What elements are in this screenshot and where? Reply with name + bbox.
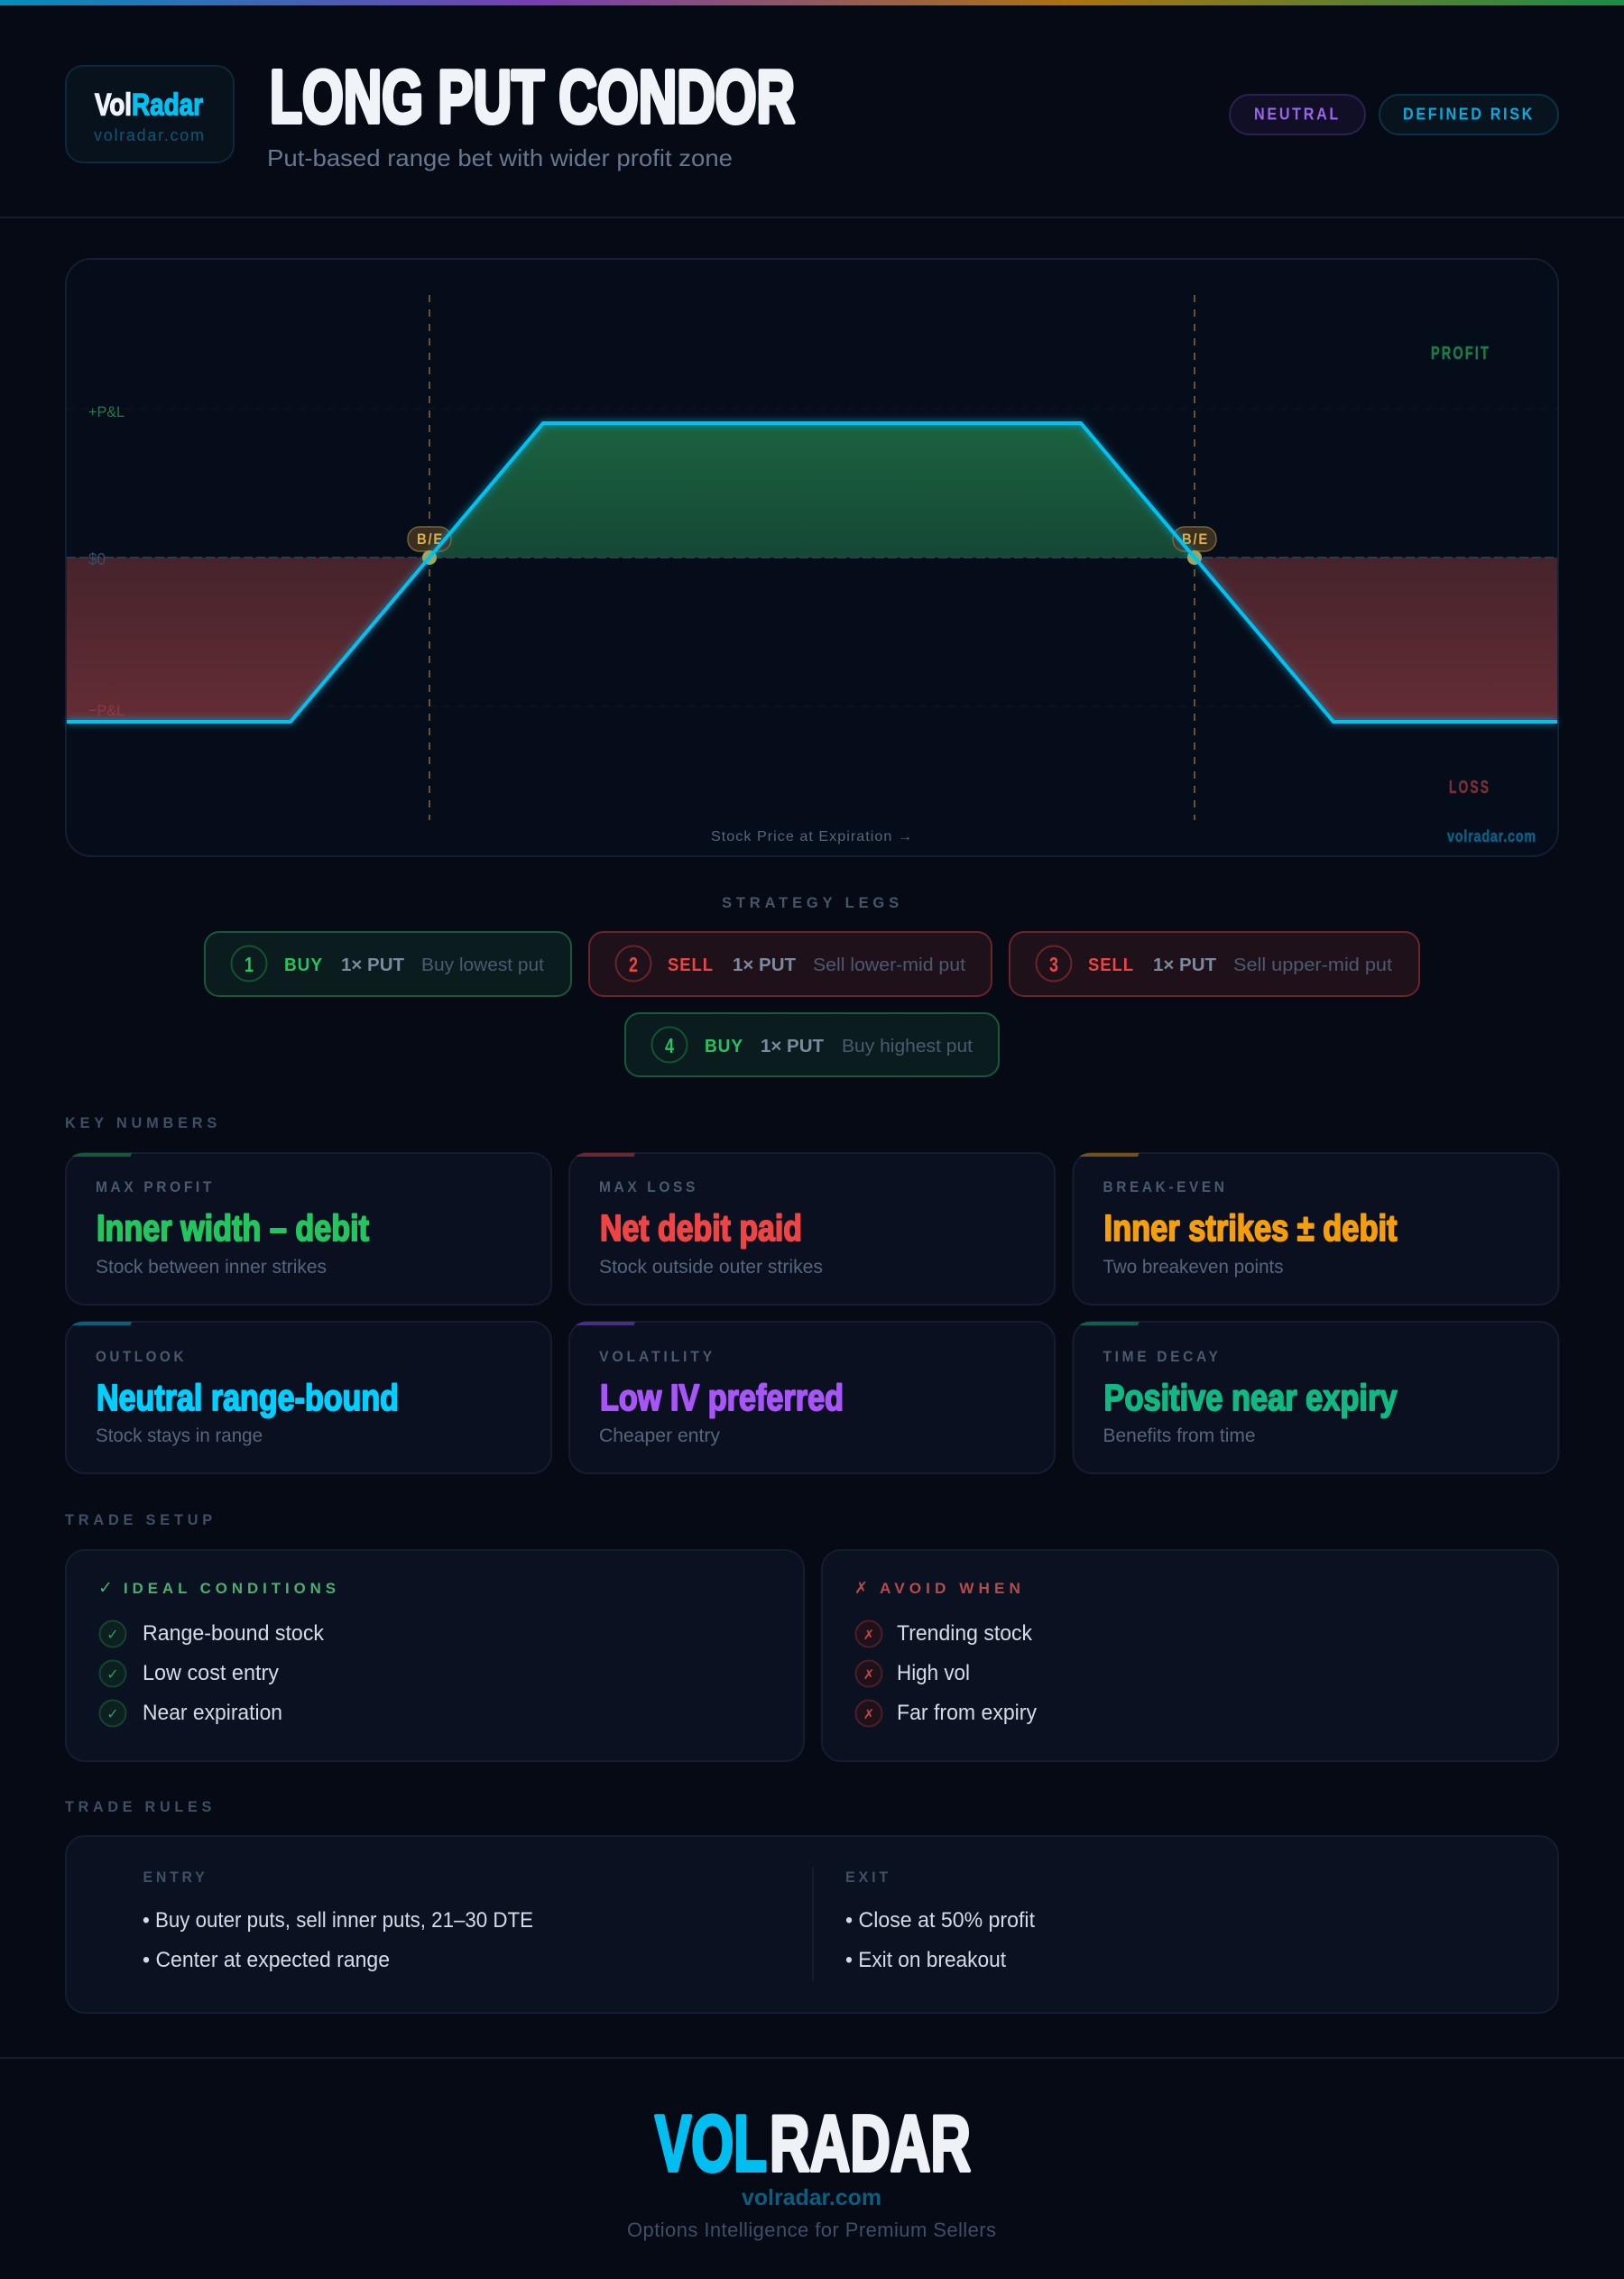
leg 4: BUY (705, 1037, 743, 1056)
heading: key numbers: KEY NUMBERS (65, 1114, 221, 1131)
footer tagline: Options Intelligence for Premium Sellers (627, 2219, 996, 2241)
card: time decay: Benefits from time (1103, 1426, 1256, 1446)
leg 3: 3 (1049, 953, 1058, 976)
leg 3 (1010, 932, 1419, 996)
leg 3: SELL (1088, 955, 1134, 975)
leg 2: 2 (629, 953, 638, 976)
leg 2: SELL (668, 955, 714, 975)
axis label: $0: $0 (88, 550, 106, 568)
condition: low cost entry: ✓ (106, 1667, 119, 1683)
card: outlook (66, 1322, 551, 1473)
panel: avoid when (822, 1550, 1558, 1761)
logo badge (66, 66, 234, 162)
footer (627, 2099, 996, 2241)
avoid: high vol (855, 1660, 970, 1687)
card: max loss: Stock outside outer strikes (599, 1257, 823, 1278)
leg 1: Buy lowest put (421, 955, 544, 975)
entry rules: • Center at expected range (143, 1948, 390, 1972)
exit rules: • Exit on breakout (845, 1948, 1006, 1972)
avoid: far from expiry (855, 1700, 1037, 1727)
footer url: volradar.com (742, 2185, 881, 2210)
chart watermark: volradar.com (1447, 827, 1536, 845)
avoid: far from expiry: ✗ (863, 1707, 874, 1722)
leg 1: BUY (284, 955, 323, 975)
panel: avoid when: AVOID WHEN (880, 1580, 1025, 1597)
logo badge: volradar.com (94, 126, 204, 144)
heading: trade rules: TRADE RULES (65, 1798, 216, 1815)
entry rules: • Buy outer puts, sell inner puts, 21–30 DTE (143, 1908, 533, 1933)
panel: ideal conditions: ✓ (98, 1579, 113, 1598)
footer logo: VOL (655, 2099, 767, 2188)
break-even marker right: B/E (1182, 531, 1209, 548)
loss zone right (1195, 558, 1557, 722)
card: break-even: Two breakeven points (1103, 1257, 1283, 1278)
leg 2: Sell lower-mid put (813, 955, 965, 975)
card: break-even: BREAK-EVEN (1103, 1178, 1227, 1195)
condition: range-bound stock: Range-bound stock (143, 1621, 325, 1646)
card: volatility: Cheaper entry (599, 1426, 721, 1446)
card: break-even (1074, 1153, 1559, 1305)
card: max loss: Net debit paid (600, 1207, 802, 1249)
heading: strategy legs: STRATEGY LEGS (722, 894, 903, 911)
card: max profit: Inner width – debit (97, 1207, 369, 1249)
break-even marker right (1173, 527, 1216, 565)
leg 4: 1× PUT (761, 1037, 824, 1056)
leg 3: Sell upper-mid put (1233, 955, 1392, 975)
top gradient bar (0, 0, 1624, 5)
condition: near expiration (99, 1700, 282, 1727)
condition: range-bound stock: ✓ (106, 1628, 119, 1643)
footer logo: RADAR (770, 2099, 971, 2188)
leg 1: 1 (245, 953, 254, 976)
leg 4: Buy highest put (842, 1037, 973, 1056)
heading: trade setup: TRADE SETUP (65, 1511, 217, 1528)
badge: defined risk (1379, 95, 1558, 134)
condition: near expiration: ✓ (106, 1707, 119, 1722)
card: volatility: VOLATILITY (599, 1348, 715, 1365)
card: time decay: TIME DECAY (1103, 1348, 1222, 1365)
avoid: far from expiry: Far from expiry (897, 1701, 1037, 1725)
card: time decay (1074, 1322, 1559, 1473)
entry rules: ENTRY (143, 1868, 208, 1886)
badge: neutral (1230, 95, 1365, 134)
exit rules (845, 1868, 1035, 1972)
axis label: -P&L: −P&L (88, 702, 125, 719)
label: profit: PROFIT (1431, 344, 1490, 364)
avoid: high vol: ✗ (863, 1667, 874, 1683)
card: break-even: Inner strikes ± debit (1104, 1207, 1398, 1249)
payoff line (67, 423, 1557, 722)
card: volatility (569, 1322, 1055, 1473)
break-even marker left: B/E (417, 531, 444, 548)
title: LONG PUT CONDOR (270, 54, 795, 139)
leg 2: 1× PUT (733, 955, 796, 975)
badge: defined risk: DEFINED RISK (1403, 105, 1535, 123)
condition: low cost entry: Low cost entry (143, 1661, 279, 1685)
badge: neutral: NEUTRAL (1254, 105, 1341, 123)
card: max loss (569, 1153, 1055, 1305)
exit rules: EXIT (845, 1868, 891, 1886)
leg 4 (625, 1013, 999, 1076)
card: max loss: MAX LOSS (599, 1178, 698, 1195)
card: max profit: MAX PROFIT (96, 1178, 215, 1195)
card: volatility: Low IV preferred (600, 1377, 844, 1418)
leg 3: 1× PUT (1153, 955, 1216, 975)
logo badge: Vol (95, 88, 132, 123)
leg 1 (205, 932, 571, 996)
axis label: +P&L: +P&L (88, 403, 125, 420)
x axis label: Stock Price at Expiration → (711, 829, 913, 844)
card: time decay: Positive near expiry (1104, 1377, 1398, 1418)
panel: trade rules (66, 1836, 1558, 2013)
card: max profit: Stock between inner strikes (96, 1257, 327, 1278)
label: loss: LOSS (1449, 778, 1490, 798)
exit rules: • Close at 50% profit (845, 1908, 1035, 1933)
leg 1: 1× PUT (341, 955, 404, 975)
loss zone left (67, 558, 429, 722)
card: outlook: OUTLOOK (96, 1348, 187, 1365)
panel: ideal conditions (66, 1550, 804, 1761)
card: outlook: Neutral range-bound (97, 1377, 399, 1418)
panel: payoff chart (66, 259, 1558, 856)
entry rules (143, 1868, 533, 1972)
panel: avoid when: ✗ (854, 1579, 868, 1597)
leg 2 (589, 932, 992, 996)
condition: low cost entry (99, 1660, 279, 1687)
footer logo (655, 2099, 971, 2188)
logo badge: Radar (132, 88, 203, 123)
break-even marker left (408, 527, 451, 565)
profit zone (429, 423, 1195, 558)
avoid: high vol: High vol (897, 1661, 970, 1685)
avoid: trending stock: Trending stock (897, 1621, 1033, 1646)
header (66, 54, 1558, 171)
card: outlook: Stock stays in range (96, 1426, 263, 1446)
leg 4: 4 (665, 1034, 674, 1057)
condition: near expiration: Near expiration (143, 1701, 282, 1725)
subtitle: Put-based range bet with wider profit zone (267, 144, 733, 171)
avoid: trending stock: ✗ (863, 1628, 874, 1643)
avoid: trending stock (855, 1620, 1033, 1647)
card: max profit (66, 1153, 551, 1305)
panel: ideal conditions: IDEAL CONDITIONS (124, 1580, 340, 1597)
